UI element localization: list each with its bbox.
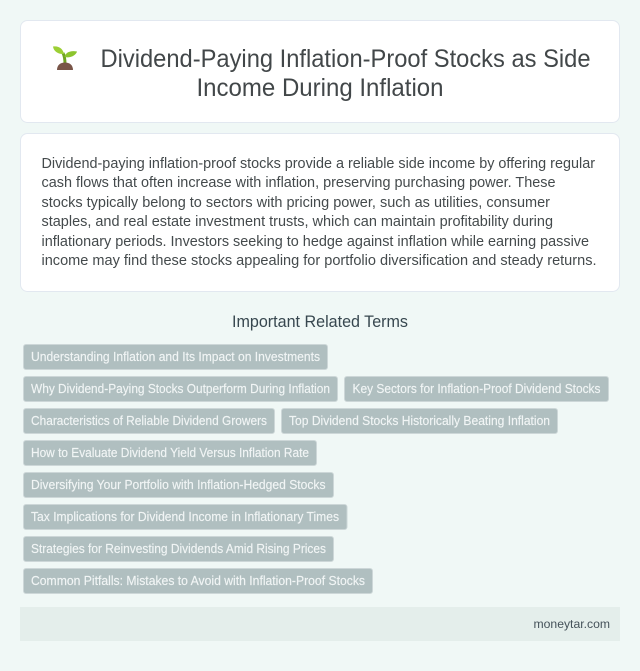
tag xyxy=(24,440,316,466)
panel: description xyxy=(20,134,620,292)
tag xyxy=(24,472,334,498)
tag xyxy=(24,408,274,434)
footer xyxy=(20,607,620,641)
text block: description: Dividend-paying inflation-proof stocks provide a reliable side income by offering regular xyxy=(42,156,595,172)
tag: Understanding Inflation and Its Impact on Investments xyxy=(31,350,320,364)
tag xyxy=(344,376,608,402)
text block: description xyxy=(42,156,596,269)
text block: description: cash flows that often increase with inflation, preserving purchasing power. These xyxy=(42,175,556,191)
tag: Key Sectors for Inflation-Proof Dividend Stocks xyxy=(352,382,600,396)
text block: description: stocks typically belong to sectors with pricing power, such as utilities, consumer xyxy=(42,195,550,211)
panel: title card xyxy=(20,20,620,122)
tag: Top Dividend Stocks Historically Beating Inflation xyxy=(289,414,550,428)
text block: description: inflationary periods. Investors seeking to hedge against inflation while earning passive xyxy=(42,234,589,250)
tag: Strategies for Reinvesting Dividends Amid Rising Prices xyxy=(31,542,326,556)
tag xyxy=(24,376,338,402)
tag: Diversifying Your Portfolio with Inflation-Hedged Stocks xyxy=(31,478,326,492)
footer source text: moneytar.com xyxy=(534,617,610,631)
heading: important related terms: Important Related Terms xyxy=(232,313,408,331)
tag list xyxy=(24,344,608,594)
tag: Common Pitfalls: Mistakes to Avoid with Inflation-Proof Stocks xyxy=(31,574,365,588)
title: Income During Inflation xyxy=(196,75,444,102)
text block: description: staples, and real estate investment trusts, which can maintain profitability during xyxy=(42,214,553,230)
tag xyxy=(24,344,328,370)
title: Dividend-Paying Inflation-Proof Stocks as Side xyxy=(100,46,590,73)
title xyxy=(100,46,590,102)
tag xyxy=(282,408,558,434)
tag xyxy=(24,536,334,562)
tag: Characteristics of Reliable Dividend Growers xyxy=(31,414,267,428)
tag xyxy=(24,504,347,530)
tag xyxy=(24,568,372,594)
text block: description: income may find these stocks appealing for portfolio diversification and steady returns. xyxy=(42,253,596,269)
tag: How to Evaluate Dividend Yield Versus Inflation Rate xyxy=(31,446,309,460)
tag: Tax Implications for Dividend Income in Inflationary Times xyxy=(31,510,339,524)
tag: Why Dividend-Paying Stocks Outperform During Inflation xyxy=(31,382,330,396)
icon: seedling xyxy=(53,46,77,70)
